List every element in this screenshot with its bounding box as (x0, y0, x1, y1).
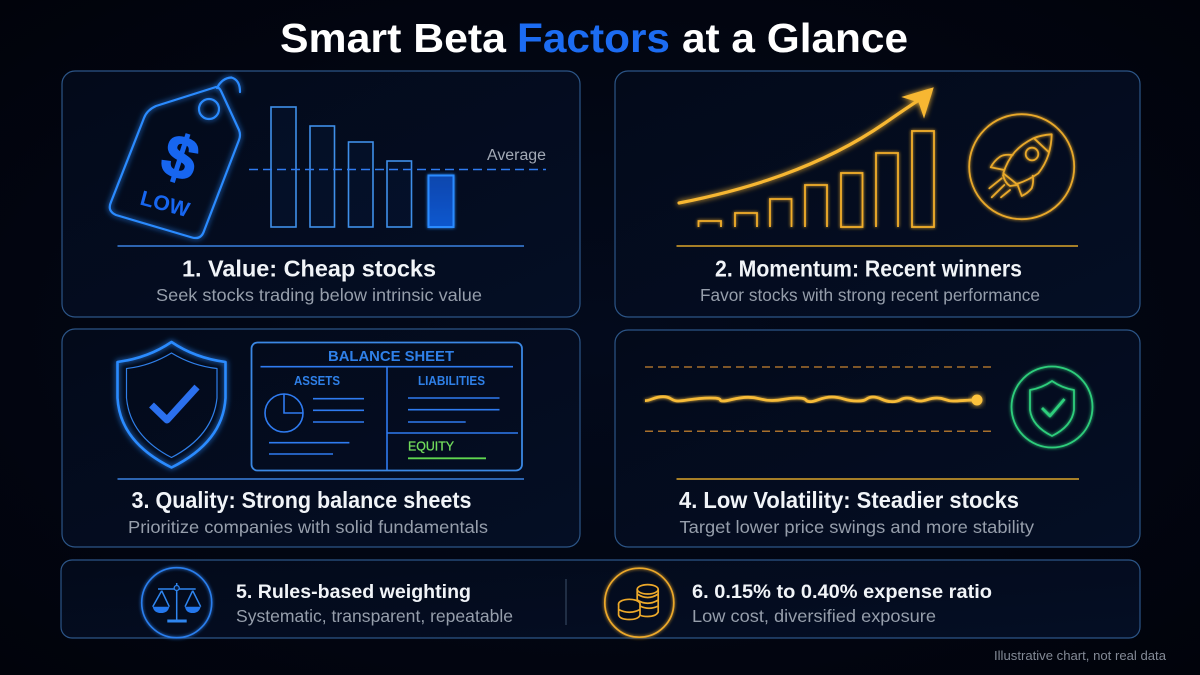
icon: price tag (110, 78, 240, 238)
text: quality: Prioritize companies with solid fundamentals (128, 517, 488, 537)
text: momentum: Favor stocks with strong recent performance (700, 285, 1040, 305)
text: low volatility: Target lower price swings and more stability (680, 517, 1034, 537)
heading: expense ratio: 6. 0.15% to 0.40% expense ratio (692, 581, 992, 603)
heading: value: 1. Value: Cheap stocks (182, 256, 436, 282)
panel: quality (62, 329, 580, 547)
bar chart: value (249, 107, 546, 227)
table: balance sheet: ASSETS (294, 373, 340, 388)
table: balance sheet: BALANCE SHEET (328, 348, 454, 365)
text: expense ratio: Low cost, diversified exposure (692, 606, 936, 626)
icon: scales (142, 568, 212, 638)
bar chart: momentum (698, 131, 934, 227)
heading: rules-based: 5. Rules-based weighting (236, 581, 471, 603)
text: rules-based: Systematic, transparent, repeatable (236, 606, 513, 626)
table: balance sheet: EQUITY (408, 438, 454, 454)
panel: low volatility (615, 330, 1140, 547)
table: balance sheet (252, 342, 522, 470)
text: value: Seek stocks trading below intrinsic value (156, 285, 482, 305)
arrow: growth curve (679, 88, 933, 203)
table: balance sheet: LIABILITIES (418, 373, 485, 388)
panel: bottom strip (61, 560, 1140, 638)
heading: quality: 3. Quality: Strong balance sheets (132, 487, 472, 513)
heading: momentum: 2. Momentum: Recent winners (715, 256, 1022, 282)
chart: steady line (645, 367, 992, 431)
title: at a Glance (682, 15, 908, 61)
icon: green shield (1012, 366, 1092, 448)
panel: value (62, 71, 580, 317)
footnote: Illustrative chart, not real data (994, 649, 1166, 663)
heading: low volatility: 4. Low Volatility: Steadier stocks (679, 487, 1019, 513)
panel: momentum (615, 71, 1140, 317)
icon: rocket (969, 114, 1074, 219)
icon: price tag: LOW (138, 187, 192, 222)
title: Factors (517, 15, 670, 61)
bar chart: value: Average (487, 147, 546, 164)
title (280, 15, 908, 61)
icon: shield (118, 342, 226, 468)
icon: coins (605, 568, 674, 637)
title: Smart Beta (280, 15, 506, 61)
icon: price tag: $ (154, 121, 206, 195)
